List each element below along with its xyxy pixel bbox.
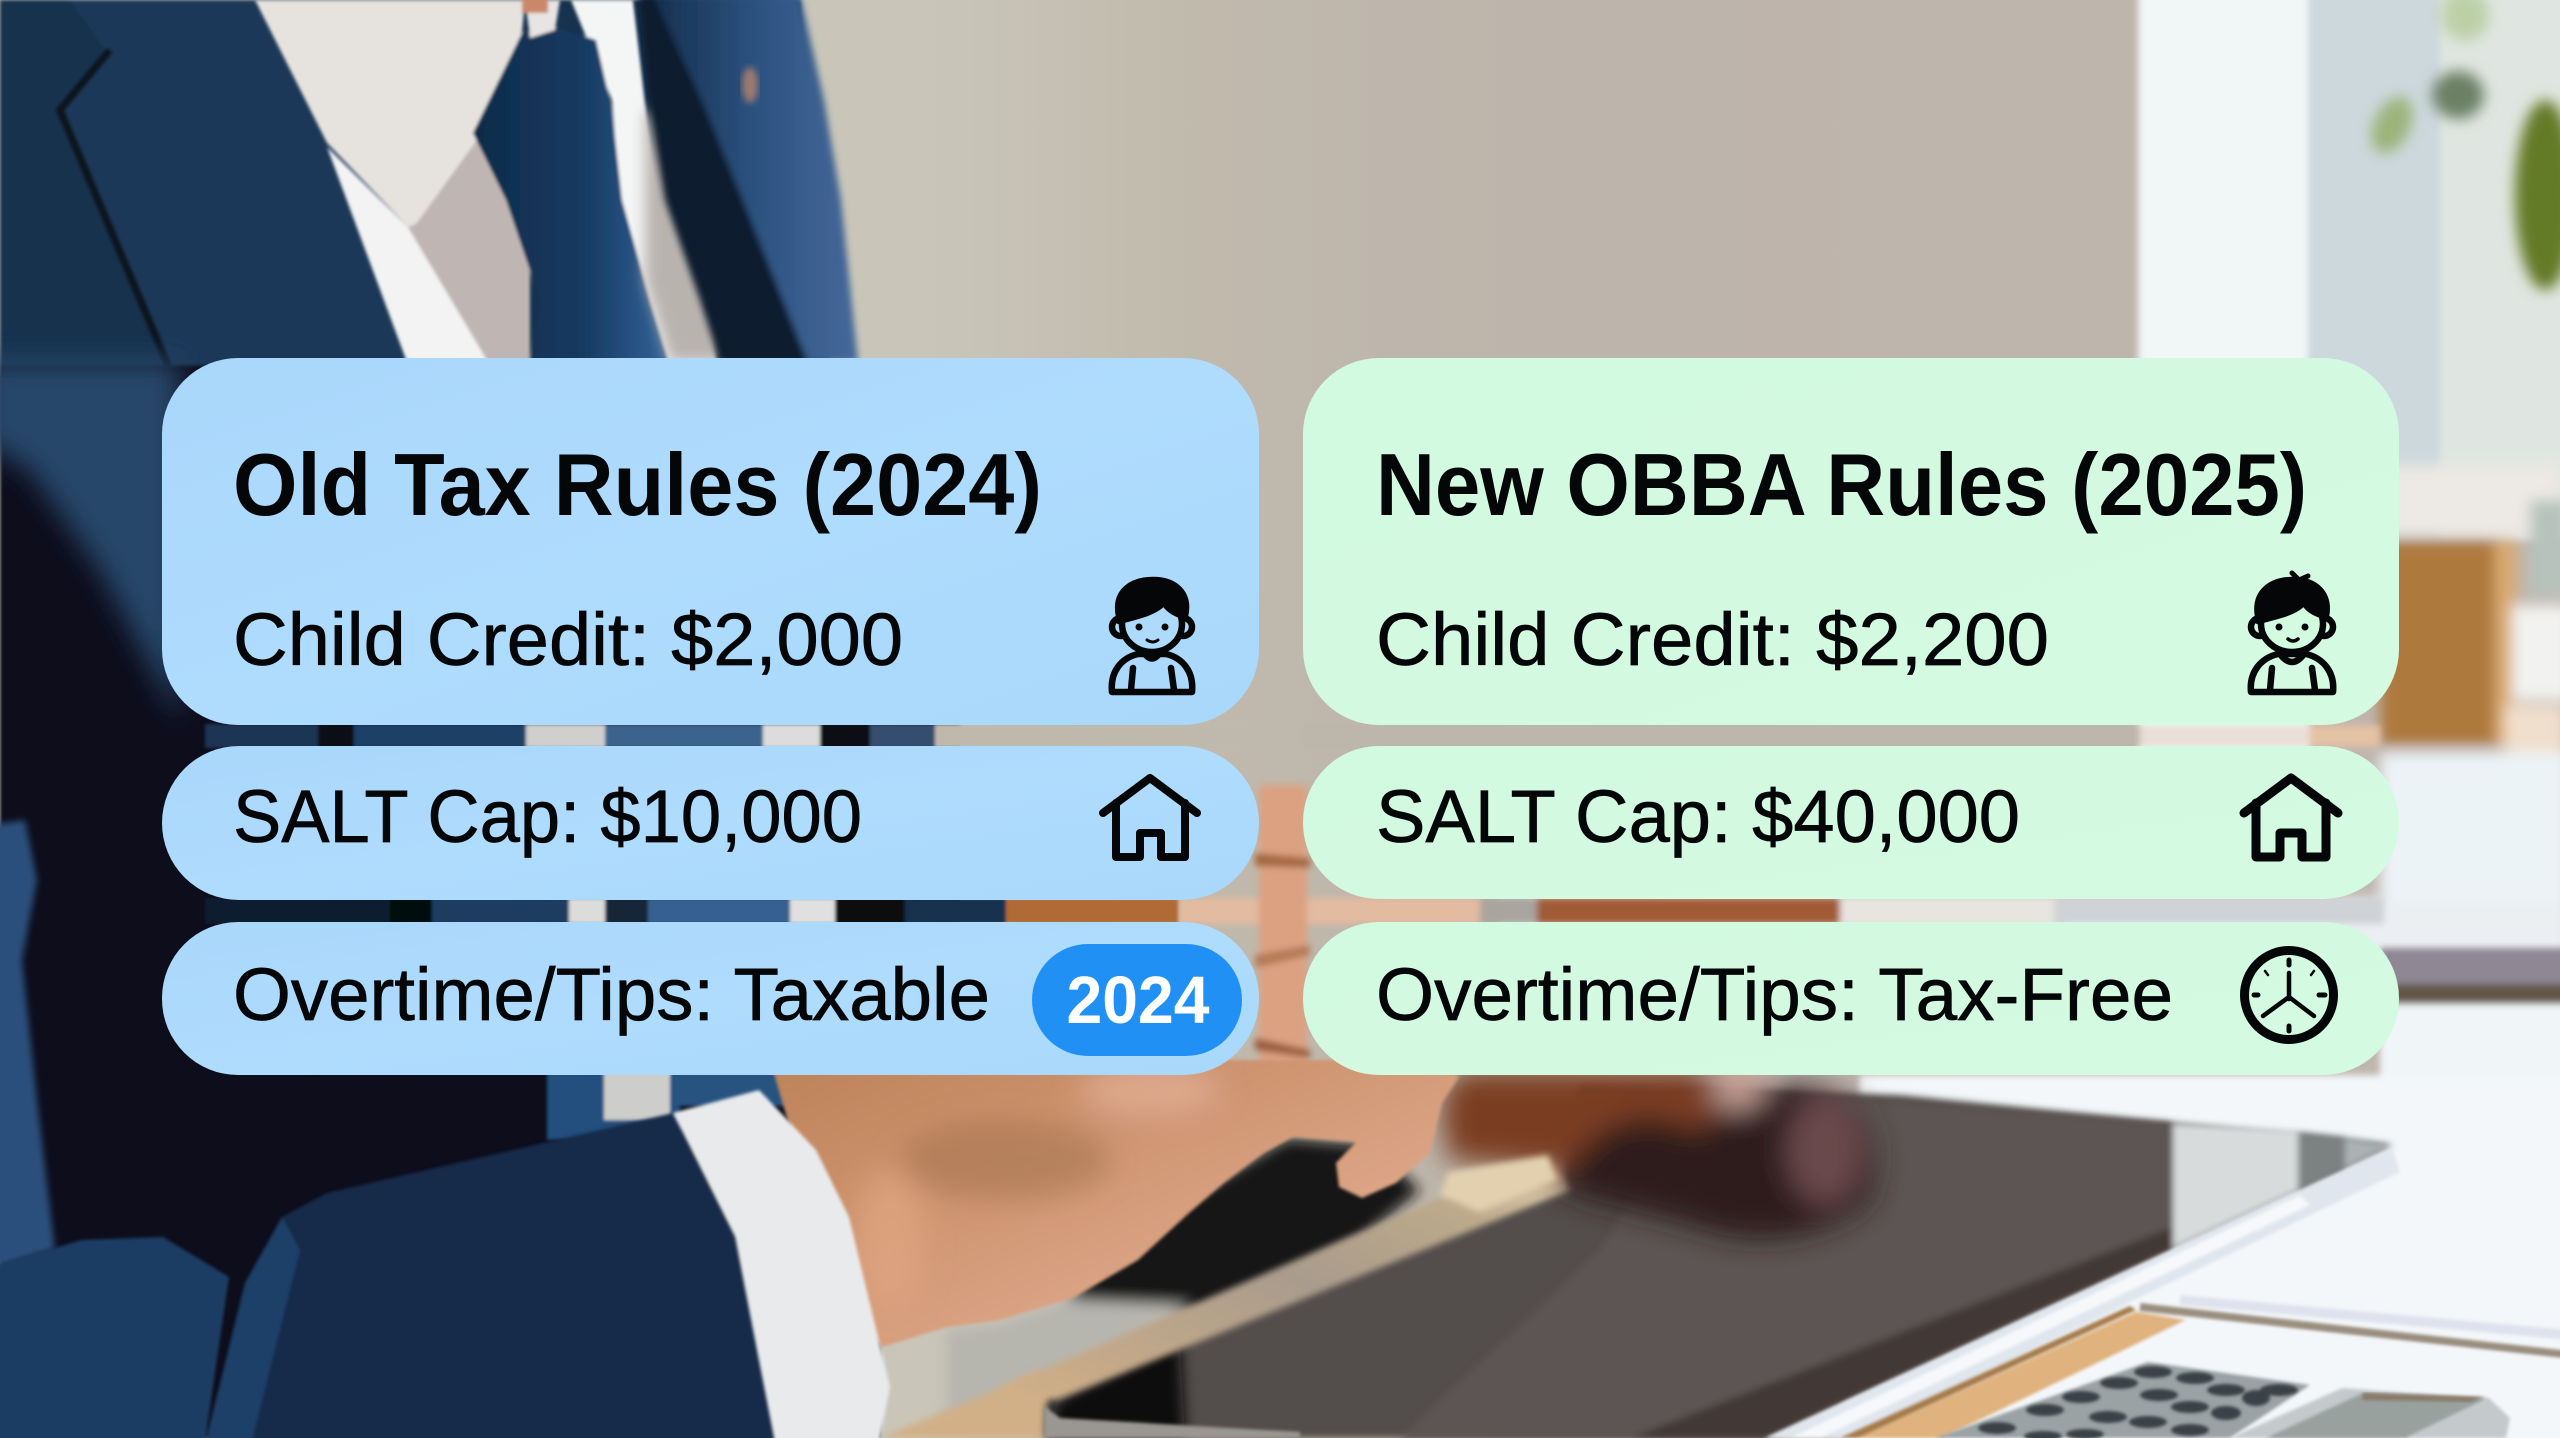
card: old rules header and child credit [162,358,1259,725]
text: child credit 2000: Child Credit: $2,000 [233,598,903,681]
hand shading [855,1064,1220,1310]
badge: 2024 [1032,944,1242,1056]
desk papers [1500,900,2560,1438]
icon: house [2244,778,2338,857]
row: overtime tips taxable [162,922,1259,1075]
shirt cuff [673,1090,890,1438]
shirt shadow right of tie [645,110,740,362]
gap strip: right column rows [1178,725,2384,924]
heading: old tax rules: Old Tax Rules (2024) [233,435,1042,534]
tablet dark corner [1050,1340,1185,1438]
dark space behind hand and gray floor [947,1138,1420,1430]
tablet silver edge [1765,1148,2400,1438]
heading: new OBBA rules: New OBBA Rules (2025) [1376,435,2307,534]
skin between columns [1255,785,1310,1075]
plant leaves [2363,0,2560,290]
badge: 2024: 2024 [1066,963,1210,1038]
text: salt cap 40000: SALT Cap: $40,000 [1376,775,2020,858]
icon: clock [2244,950,2334,1040]
calculator keys [1978,1366,2298,1438]
jacket lit shoulder [0,360,180,720]
shirt region behind tie [408,133,530,365]
tablet on desk [880,1085,2392,1438]
right desk items: cup, shelf and papers [2060,465,2560,960]
suit jacket, shirt and tie [0,0,1259,1438]
row: salt cap 10000 [162,746,1259,900]
strip below panels [547,1070,680,1140]
tablet reflection bands [1400,1088,2392,1438]
gap strip: left column rows [205,724,1259,1140]
right lapel [638,0,858,362]
text: overtime tips taxable: Overtime/Tips: Taxable [233,953,990,1036]
row: salt cap 40000 [1303,746,2399,899]
calculator [1935,1362,2510,1438]
row: overtime tips tax-free [1303,922,2399,1075]
wood corner and paper edge [1840,1300,2560,1438]
icon: house [1103,778,1197,857]
tablet bright wood tip [1440,1155,1557,1212]
jacket fold left [0,820,55,1270]
panel: old tax rules (2024) [162,358,1259,1075]
reflection of hand on tablet [1440,1061,1875,1239]
panel: new OBBA rules (2025) [1303,358,2399,1075]
card: new rules header and child credit [1303,358,2399,725]
shelf band [2380,948,2560,1134]
window and plant [2138,0,2560,780]
text: overtime tips tax-free: Overtime/Tips: Tax-Free [1376,953,2173,1036]
text: child credit 2200: Child Credit: $2,200 [1376,598,2049,681]
icon: child [1112,580,1192,692]
icon: child with tuft [2251,573,2333,692]
jacket sleeve [0,1113,785,1438]
text: salt cap 10000: SALT Cap: $10,000 [233,775,862,858]
hand and fingers [770,1060,1459,1347]
